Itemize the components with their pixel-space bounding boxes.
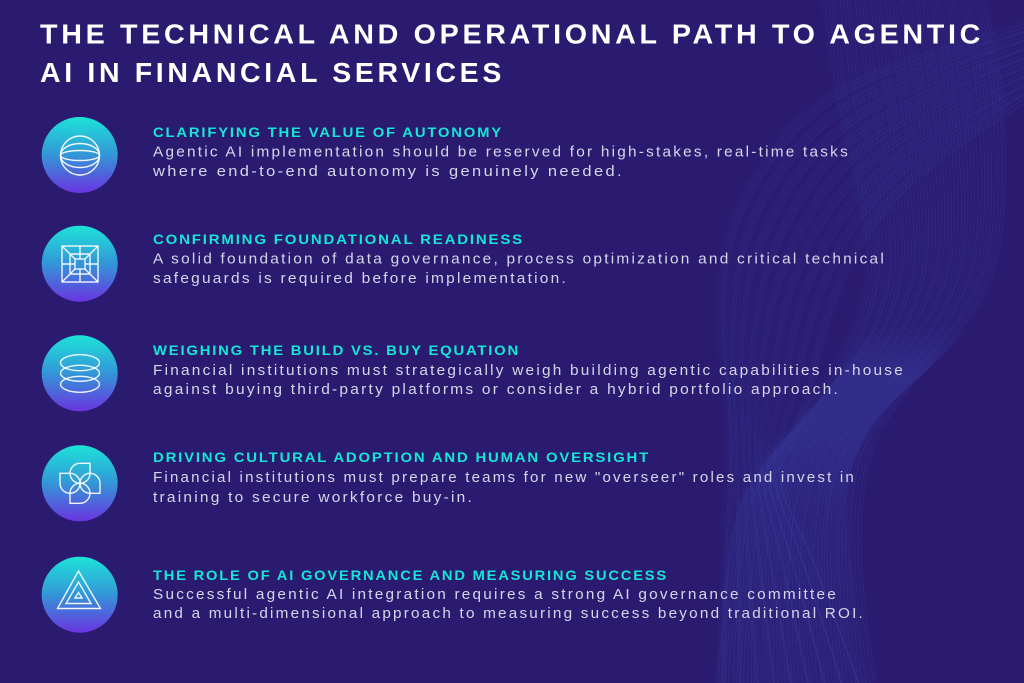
icon: stacked rings [42,335,118,411]
description [152,144,850,180]
heading: WEIGHING THE BUILD VS. BUY EQUATION [153,342,520,358]
heading: CLARIFYING THE VALUE OF AUTONOMY [153,124,503,140]
item 3: weighing the build vs. buy equation [42,335,905,411]
title: THE TECHNICAL AND OPERATIONAL PATH TO AGENTIC [40,18,984,50]
title [40,18,984,88]
icon: nested triangles [42,557,118,633]
item 1: clarifying the value of autonomy [42,117,850,193]
description: Agentic AI implementation should be reserved for high-stakes, real-time tasks [153,144,850,160]
description: and a multi-dimensional approach to measuring success beyond traditional ROI. [153,606,865,622]
description: A solid foundation of data governance, process optimization and critical technical [153,252,886,268]
description: Successful agentic AI integration requires a strong AI governance committee [153,587,838,603]
description [153,363,905,398]
item 4: driving cultural adoption and human oversight [42,445,856,521]
item 2: confirming foundational readiness [42,226,886,302]
icon: sphere [42,117,118,193]
description: against buying third-party platforms or consider a hybrid portfolio approach. [153,382,840,398]
description [153,470,856,506]
heading: THE ROLE OF AI GOVERNANCE AND MEASURING SUCCESS [153,567,668,583]
item 5: the role of ai governance and measuring success [42,557,865,633]
heading: DRIVING CULTURAL ADOPTION AND HUMAN OVERSIGHT [153,449,650,465]
description: Financial institutions must prepare teams for new "overseer" roles and invest in [153,470,856,486]
description: where end-to-end autonomy is genuinely needed. [152,164,624,180]
heading: CONFIRMING FOUNDATIONAL READINESS [153,231,524,247]
description [153,587,865,622]
description: Financial institutions must strategically weigh building agentic capabilities in-house [153,363,905,379]
decorative wave ribbons [718,0,1024,683]
description [153,252,886,287]
description: training to secure workforce buy-in. [153,490,474,506]
icon: four petals [42,445,118,521]
title: AI IN FINANCIAL SERVICES [40,57,505,88]
icon: nested square grid [42,226,118,302]
description: safeguards is required before implementation. [153,271,568,287]
